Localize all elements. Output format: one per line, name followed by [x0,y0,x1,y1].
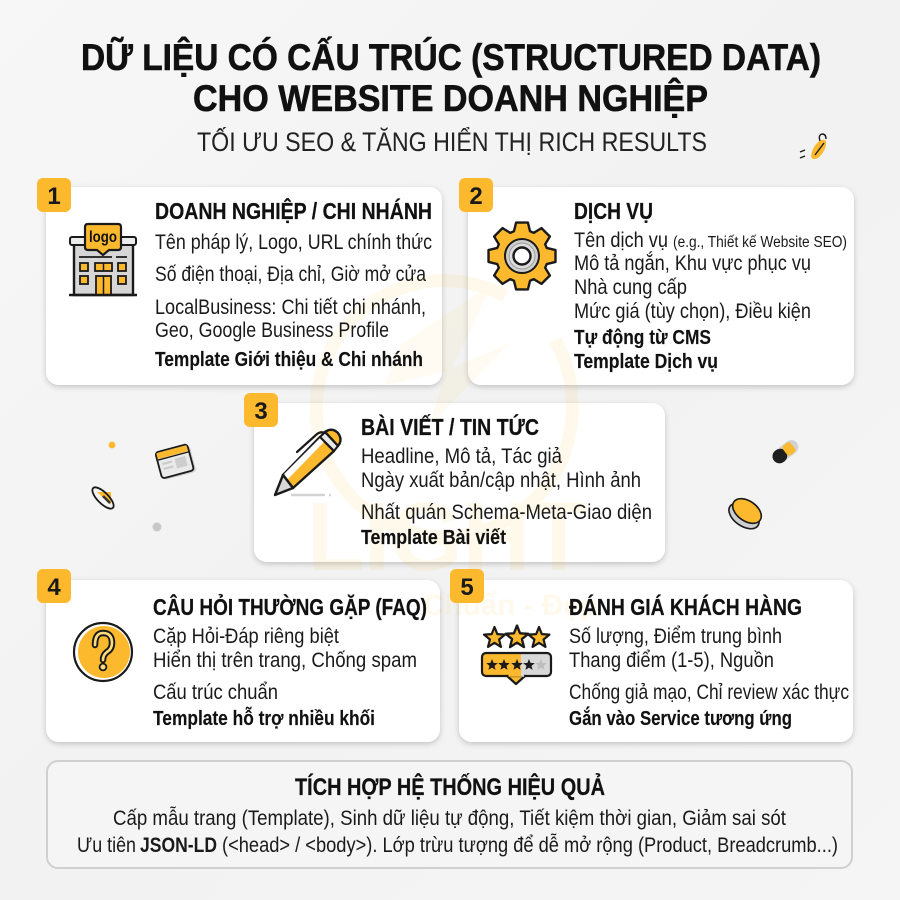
card 3 text: Ngày xuất bản/cập nhật, Hình ảnh [361,469,641,492]
card 2 text [574,198,847,373]
card 1 text: Số điện thoại, Địa chỉ, Giờ mở cửa [155,263,426,286]
card 5 text: ĐÁNH GIÁ KHÁCH HÀNG [569,593,802,620]
card 5 badge [450,569,484,603]
card 2 badge [459,178,493,212]
card 3 text [361,413,652,549]
panel: card 4 background [46,580,440,742]
decoration: coin right [724,494,766,534]
card 4 text: Cặp Hỏi-Đáp riêng biệt [153,625,339,648]
card 2 text: Nhà cung cấp [574,276,687,299]
watermark logo [307,281,598,622]
panel: system integration: TÍCH HỢP HỆ THỐNG HIỆU QUẢ [295,772,605,801]
panel: system integration: JSON-LD [140,834,217,857]
watermark logo: Chuẩn - Đẹp [423,589,598,622]
card 5 text: Thang điểm (1-5), Nguồn [569,649,774,672]
card 3 text: Headline, Mô tả, Tác giả [361,445,562,468]
card 1 text: Geo, Google Business Profile [155,319,389,342]
title [81,36,821,119]
card 1 badge [37,178,71,212]
card 2 text: Tự động từ CMS [574,326,711,349]
card 4 text [153,592,427,730]
card 3 icon: pencil [275,430,340,495]
card 2 text: Mức giá (tùy chọn), Điều kiện [574,300,811,323]
card 4 badge: 4 [47,574,61,601]
card 1 text [155,197,432,371]
card 4 badge [37,569,71,603]
card 5 badge: 5 [460,574,474,601]
card 3 text: BÀI VIẾT / TIN TỨC [361,413,539,440]
card 1 text: LocalBusiness: Chi tiết chi nhánh, [155,296,426,319]
card 5 text: Chống giả mạo, Chỉ review xác thực [569,681,849,704]
card 5 text [569,593,849,730]
panel: system integration [47,761,852,868]
card 2 text: Mô tả ngắn, Khu vực phục vụ [574,252,811,275]
panel: card 5 background [459,580,853,742]
card 2 text: (e.g., Thiết kế Website SEO) [673,234,847,251]
watermark logo: LIGHT [307,482,587,591]
title: DỮ LIỆU CÓ CẤU TRÚC (STRUCTURED DATA) [81,36,821,78]
card 4 text: Template hỗ trợ nhiều khối [153,706,375,730]
panel: card 1 background [46,187,442,385]
decoration: floating pen top right [800,134,826,159]
card 5 text: Gắn vào Service tương ứng [569,706,792,730]
card 4 text: CÂU HỎI THƯỜNG GẶP (FAQ) [153,592,427,620]
panel: system integration: Ưu tiên [77,834,136,857]
card 1 badge: 1 [47,183,61,210]
card 3 badge: 3 [254,398,268,425]
card 5 text: Số lượng, Điểm trung bình [569,625,782,648]
card 3 text: Nhất quán Schema-Meta-Giao diện [361,501,652,524]
subtitle: TỐI ƯU SEO & TĂNG HIỂN THỊ RICH RESULTS [197,125,707,157]
card 5 icon: star rating [482,626,551,684]
decoration: grey dot [152,522,162,532]
card 3 badge [244,393,278,427]
card 2 text: Template Dịch vụ [574,350,718,373]
card 2 text: Tên dịch vụ [574,229,668,252]
card 4 text: Hiển thị trên trang, Chống spam [153,649,417,672]
panel: card 3 background [254,403,665,562]
card 3 text: Template Bài viết [361,526,506,549]
panel: card 2 background [468,187,854,385]
card 2 badge: 2 [469,183,483,210]
decoration: tilted coin left [89,484,117,512]
card 1 text: DOANH NGHIỆP / CHI NHÁNH [155,197,432,224]
card 1 icon: building with logo: logo [89,229,117,246]
card 1 text: Tên pháp lý, Logo, URL chính thức [155,231,432,254]
card 2 icon: gear [489,223,555,289]
decoration: capsule right [770,437,801,466]
card 2 text: DỊCH VỤ [574,198,653,224]
decoration: browser card [155,444,196,481]
title: CHO WEBSITE DOANH NGHIỆP [193,77,708,119]
card 4 icon: question mark [74,623,132,681]
card 4 text: Cấu trúc chuẩn [153,681,278,704]
panel: system integration: Cấp mẫu trang (Template), Sinh dữ liệu tự động, Tiết kiệm thời gian, Giảm sai sót [113,807,786,830]
card 1 icon: building with logo [69,224,137,295]
card 1 text: Template Giới thiệu & Chi nhánh [155,348,423,371]
decoration: yellow dot [109,442,115,448]
